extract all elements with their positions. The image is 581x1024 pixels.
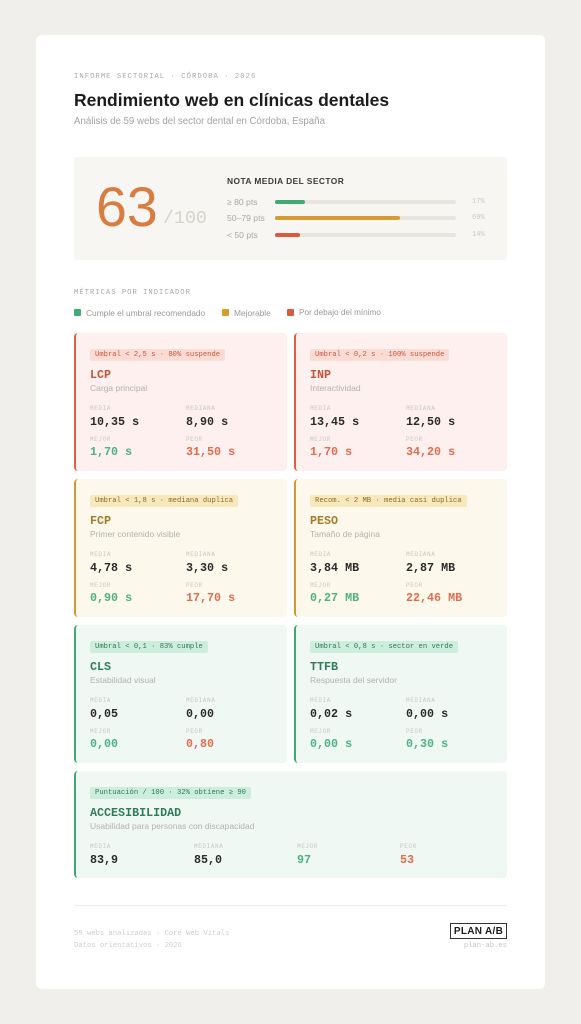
panel: FCP: MEJOR <box>90 582 111 589</box>
panel: CLS: 0,00 <box>90 737 118 751</box>
panel: TTFB: 0,02 s <box>310 707 352 721</box>
panel: LCP <box>74 333 287 471</box>
panel: LCP: 10,35 s <box>90 415 139 429</box>
panel: CLS: MEJOR <box>90 728 111 735</box>
website: plan-ab.es <box>464 942 507 950</box>
panel: INP: PEOR <box>406 436 423 443</box>
panel: PESO: Recom. < 2 MB · media casi duplica <box>315 497 462 505</box>
distribution row: 50 to 79: 50–79 pts <box>227 213 265 223</box>
panel: INP: MEJOR <box>310 436 331 443</box>
panel: INP: 12,50 s <box>406 415 455 429</box>
panel: PESO: PESO <box>310 514 338 528</box>
panel: CLS: CLS <box>90 660 111 674</box>
panel: PESO: PEOR <box>406 582 423 589</box>
logo: PLAN A/B <box>454 926 503 937</box>
panel: TTFB: Respuesta del servidor <box>310 675 397 685</box>
panel: FCP: MEDIA <box>90 551 111 558</box>
panel: PESO <box>294 479 507 617</box>
panel: INP: 1,70 s <box>310 445 352 459</box>
panel: ACCESIBILIDAD: 97 <box>297 853 311 867</box>
panel: INP: Umbral < 0,2 s · 100% suspende <box>315 351 444 359</box>
score panel heading: NOTA MEDIA DEL SECTOR <box>227 176 344 186</box>
footer note <box>74 930 229 950</box>
panel: ACCESIBILIDAD: MEDIANA <box>194 843 223 850</box>
score value: 63 <box>96 176 158 238</box>
panel: sector score <box>74 157 507 260</box>
panel: LCP: PEOR <box>186 436 203 443</box>
panel: INP <box>294 333 507 471</box>
panel: FCP <box>74 479 287 617</box>
panel: CLS <box>74 625 287 763</box>
panel: FCP: Umbral < 1,8 s · mediana duplica <box>95 497 233 505</box>
panel: TTFB: 0,00 s <box>406 707 448 721</box>
distribution row: under 50 <box>227 230 485 240</box>
panel: PESO: 22,46 MB <box>406 591 462 605</box>
panel: CLS: MEDIANA <box>186 697 215 704</box>
panel: LCP: LCP <box>90 368 111 382</box>
distribution row: 80 plus: ≥ 80 pts <box>227 197 258 207</box>
distribution row: 80 plus: 17% <box>472 198 485 206</box>
panel: LCP: MEDIANA <box>186 405 215 412</box>
distribution row: 50 to 79 <box>227 213 485 223</box>
footer note: Datos orientativos · 2026 <box>74 942 182 950</box>
panel: PESO: MEJOR <box>310 582 331 589</box>
panel: PESO: 0,27 MB <box>310 591 359 605</box>
panel: CLS: Umbral < 0,1 · 83% cumple <box>95 643 203 651</box>
panel: FCP: 17,70 s <box>186 591 235 605</box>
panel: LCP: MEDIA <box>90 405 111 412</box>
legend: Cumple el umbral recomendado <box>86 308 205 318</box>
panel: TTFB <box>294 625 507 763</box>
panel: ACCESIBILIDAD: Usabilidad para personas con discapacidad <box>90 821 254 831</box>
panel: PESO: MEDIA <box>310 551 331 558</box>
panel: CLS: Estabilidad visual <box>90 675 156 685</box>
panel: INP: 13,45 s <box>310 415 359 429</box>
panel: TTFB: TTFB <box>310 660 338 674</box>
panel: ACCESIBILIDAD: PEOR <box>400 843 417 850</box>
panel: FCP: 4,78 s <box>90 561 132 575</box>
panel: CLS: MEDIA <box>90 697 111 704</box>
legend: Mejorable <box>234 308 271 318</box>
panel: PESO: Tamaño de página <box>310 529 380 539</box>
panel: TTFB: 0,00 s <box>310 737 352 751</box>
score scale: /100 <box>163 209 207 229</box>
panel: PESO: 3,84 MB <box>310 561 359 575</box>
panel: TTFB: PEOR <box>406 728 423 735</box>
logo <box>450 923 507 939</box>
panel: TTFB: MEDIA <box>310 697 331 704</box>
panel: LCP: MEJOR <box>90 436 111 443</box>
panel: INP: MEDIA <box>310 405 331 412</box>
panel: ACCESIBILIDAD: Puntuación / 100 · 32% obtiene ≥ 90 <box>95 789 246 797</box>
panel: FCP: FCP <box>90 514 111 528</box>
legend <box>74 308 381 318</box>
panel: INP: MEDIANA <box>406 405 435 412</box>
panel: LCP: Carga principal <box>90 383 147 393</box>
panel: ACCESIBILIDAD: MEJOR <box>297 843 318 850</box>
distribution row: under 50: < 50 pts <box>227 230 258 240</box>
panel: TTFB: MEDIANA <box>406 697 435 704</box>
subtitle: Análisis de 59 webs del sector dental en Córdoba, España <box>74 116 325 127</box>
panel: ACCESIBILIDAD: MEDIA <box>90 843 111 850</box>
panel: CLS: PEOR <box>186 728 203 735</box>
panel: LCP: 1,70 s <box>90 445 132 459</box>
panel: CLS: 0,05 <box>90 707 118 721</box>
panel: CLS: 0,80 <box>186 737 214 751</box>
panel: ACCESIBILIDAD: 85,0 <box>194 853 222 867</box>
panel: FCP: Primer contenido visible <box>90 529 180 539</box>
panel: INP: Interactividad <box>310 383 361 393</box>
panel: TTFB: MEJOR <box>310 728 331 735</box>
panel: PESO: MEDIANA <box>406 551 435 558</box>
distribution row: 50 to 79: 69% <box>472 214 485 222</box>
panel: FCP: 0,90 s <box>90 591 132 605</box>
panel: TTFB: Umbral < 0,8 s · sector en verde <box>315 643 453 651</box>
panel: INP: INP <box>310 368 331 382</box>
panel: FCP: MEDIANA <box>186 551 215 558</box>
legend: Por debajo del mínimo <box>299 308 381 317</box>
title: Rendimiento web en clínicas dentales <box>74 90 389 110</box>
panel: FCP: 3,30 s <box>186 561 228 575</box>
distribution row: 80 plus <box>227 197 485 207</box>
panel: LCP: 31,50 s <box>186 445 235 459</box>
panel: ACCESIBILIDAD <box>74 771 507 878</box>
panel: ACCESIBILIDAD: 83,9 <box>90 853 118 867</box>
panel: PESO: 2,87 MB <box>406 561 455 575</box>
panel: LCP: Umbral < 2,5 s · 80% suspende <box>95 351 220 359</box>
footer note: 59 webs analizadas · Core Web Vitals <box>74 930 229 938</box>
panel: INP: 34,20 s <box>406 445 455 459</box>
panel: ACCESIBILIDAD: 53 <box>400 853 414 867</box>
eyebrow: INFORME SECTORIAL · CÓRDOBA · 2026 <box>74 73 256 81</box>
panel: FCP: PEOR <box>186 582 203 589</box>
panel: TTFB: 0,30 s <box>406 737 448 751</box>
panel: ACCESIBILIDAD: ACCESIBILIDAD <box>90 806 181 820</box>
distribution row: under 50: 14% <box>472 231 485 239</box>
panel: CLS: 0,00 <box>186 707 214 721</box>
section heading: MÉTRICAS POR INDICADOR <box>74 289 191 297</box>
panel: LCP: 8,90 s <box>186 415 228 429</box>
